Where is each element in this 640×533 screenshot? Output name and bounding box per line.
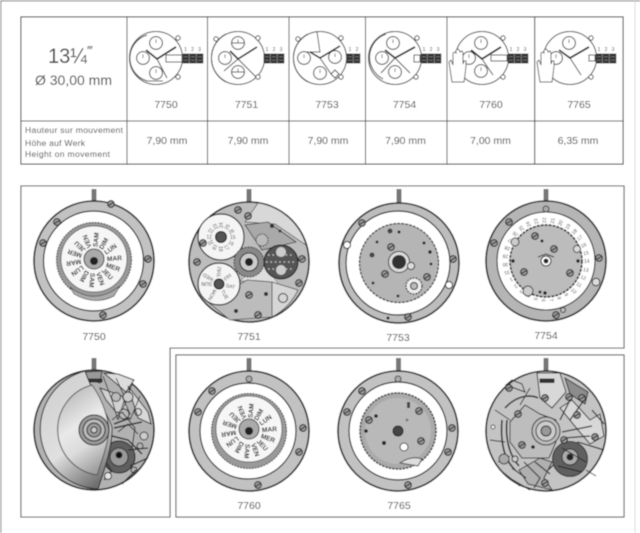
date ring numbers: 7 [548,298,554,302]
movement 7750 [34,189,154,321]
panel: lower movements frame [176,355,624,517]
icon: dial 7765 [537,32,616,84]
day disc labels: VEN [249,442,260,458]
day disc labels: DIM [232,440,245,454]
day disc labels: MAR [220,428,236,438]
date ring numbers: 18 [571,228,579,236]
day disc labels: LUN [224,435,240,448]
date ring numbers: 4 [524,293,531,299]
date ring numbers: 25 [518,224,526,232]
icon: dial 7754: 2 [430,47,433,53]
exposed mechanism [84,371,151,484]
date disc glyphs: 26 [228,228,236,236]
day disc labels: JEU [255,439,269,453]
height values: 7,90 mm [228,135,269,147]
date disc glyphs: 15 [230,235,236,241]
date disc glyphs: 21 [206,233,212,239]
label 7753: 7753 [386,332,410,344]
movement 7753 [339,189,459,323]
date ring numbers: 2 [512,283,518,289]
date disc glyphs: 16 [227,240,235,248]
day disc glyphs: SAT [225,283,235,291]
height row label: Höhe auf Werk [25,138,86,148]
triple prime mark: ‴ [87,43,93,58]
day disc labels: VEN [82,233,93,249]
height values: 7,90 mm [147,135,188,147]
icon: dial 7750: 1 [184,47,187,53]
day disc labels: SAM [87,273,95,288]
day disc labels: LUN [258,414,274,427]
calibre numbers: 7750 [154,99,178,111]
date disc glyphs: 22 [207,226,215,234]
date ring numbers: 26 [512,229,520,238]
date ring numbers: 5 [532,297,538,301]
day disc labels: MAR [65,257,81,267]
date ring numbers: 14 [584,259,590,265]
height values: 6,35 mm [558,135,599,147]
date disc glyphs: 25 [224,223,232,231]
icon: dial 7760: 3 [524,47,527,53]
day disc labels: DIM [98,237,111,251]
day disc labels: MER [105,262,121,274]
date ring numbers: 17 [576,234,584,243]
rotor [40,371,112,489]
date ring numbers: 9 [563,292,569,298]
date ring numbers: 28 [504,244,511,251]
date ring numbers: 1 [508,276,514,283]
calibre size heading: 13¼ [48,45,87,68]
calibre numbers [154,99,591,111]
icon: dial 7750 [130,32,203,84]
movement 7751 [189,189,309,322]
calibre numbers: 7753 [315,99,339,111]
height row label: Hauteur sur mouvement [25,125,124,135]
icon: dial 7751 [211,32,284,84]
day disc labels: SAM [248,403,256,418]
date ring numbers: 6 [540,299,546,302]
day disc labels: SAM [242,444,250,459]
right page edge [634,1,636,533]
day disc glyphs: TUE [219,289,230,301]
label 7751: 7751 [237,331,261,343]
day disc glyphs: MON [206,288,217,302]
icon: dial 7754: 3 [437,47,440,53]
day disc labels: MAR [107,255,123,263]
movement with rotor [34,358,154,490]
date ring numbers [502,217,590,302]
day disc labels: LUN [103,243,119,256]
height values: 7,90 mm [385,135,426,147]
icon: dial 7753: 2 [356,47,359,53]
movement 7765 [338,358,458,491]
icon: dial 7753 [293,32,360,84]
panel: upper movements frame [21,186,624,517]
icon: dial 7750: 3 [198,47,201,53]
icon: dial 7760: 2 [517,47,520,53]
icon: dial 7753: 1 [349,47,352,53]
calibre numbers: 7760 [479,99,503,111]
height row label [25,125,124,159]
icon: dial 7760: 1 [510,47,513,53]
date disc glyphs: 17 [222,244,230,252]
day disc labels: LUN [69,264,85,277]
height values [147,135,599,147]
date ring numbers: 15 [583,250,590,257]
icon: dial 7765: 1 [598,47,601,53]
day disc labels: MER [222,418,238,429]
specification table [21,17,623,164]
day disc labels: MER [260,433,276,445]
day disc labels: VEN [237,404,248,420]
movement 7760 [189,358,309,491]
calibre numbers: 7754 [393,99,416,111]
date disc glyphs: 24 [219,222,225,228]
icon: dial 7751: 3 [280,47,283,53]
calibre numbers: 7751 [235,99,258,111]
icon: dial 7765: 2 [605,47,608,53]
date disc glyphs [206,222,236,252]
date ring numbers: 31 [503,268,510,276]
icon: dial 7751: 2 [273,47,276,53]
icon: dial 7760 [449,32,528,84]
height row label: Height on movement [25,149,111,159]
day disc glyphs: SUN [201,280,212,286]
date disc glyphs: 20 [206,238,214,246]
date ring numbers: 24 [525,220,533,228]
date disc glyphs: 19 [210,243,218,251]
date ring numbers: 23 [533,218,540,225]
day disc labels: JEU [100,268,114,282]
movement 7754 [486,189,606,321]
icon: dial 7754 [368,32,441,84]
day disc labels [220,403,278,459]
label 7750: 7750 [82,331,106,343]
day disc labels: VEN [94,271,105,287]
day disc glyphs: WED [201,271,215,282]
day disc glyphs: THU [217,266,223,277]
date ring numbers: 22 [542,217,548,223]
calibre numbers: 7765 [567,99,591,111]
label 7765: 7765 [387,500,411,512]
date ring numbers: 27 [507,236,515,244]
date ring numbers: 19 [564,223,573,231]
day disc glyphs: FRI [223,273,233,283]
day disc labels: JEU [73,239,87,253]
date ring numbers: 13 [582,267,589,274]
date ring numbers: 11 [575,281,583,289]
date disc glyphs: 23 [212,222,220,230]
day disc labels: DIM [253,408,266,422]
height values: 7,90 mm [308,135,349,147]
day disc labels: DIM [77,269,90,283]
date ring numbers: 21 [550,217,557,224]
date ring numbers: 3 [518,288,524,295]
day disc labels: SAM [93,232,101,247]
icon: dial 7751: 1 [266,47,269,53]
label 7760: 7760 [237,500,261,512]
day disc glyphs [201,266,235,302]
date disc glyphs: 18 [217,246,223,252]
icon: dial 7754: 1 [423,47,426,53]
date ring numbers: 10 [569,287,577,296]
date ring numbers: 29 [502,252,509,259]
date ring numbers: 16 [580,242,588,250]
day disc labels: JEU [228,410,242,424]
day disc labels: MAR [262,426,278,434]
icon: dial 7765: 3 [612,47,615,53]
icon: dial 7750: 2 [191,47,194,53]
date ring numbers: 8 [555,296,562,301]
date ring numbers: 20 [557,219,565,227]
date ring numbers: 30 [502,261,508,267]
label 7754: 7754 [534,330,558,342]
day disc labels: MER [67,247,83,258]
diameter: Ø 30,00 mm [35,72,112,88]
date ring numbers: 12 [579,274,587,282]
day disc labels [65,232,123,288]
height values: 7,00 mm [470,135,511,147]
movement with exposed chronograph works [486,358,606,491]
